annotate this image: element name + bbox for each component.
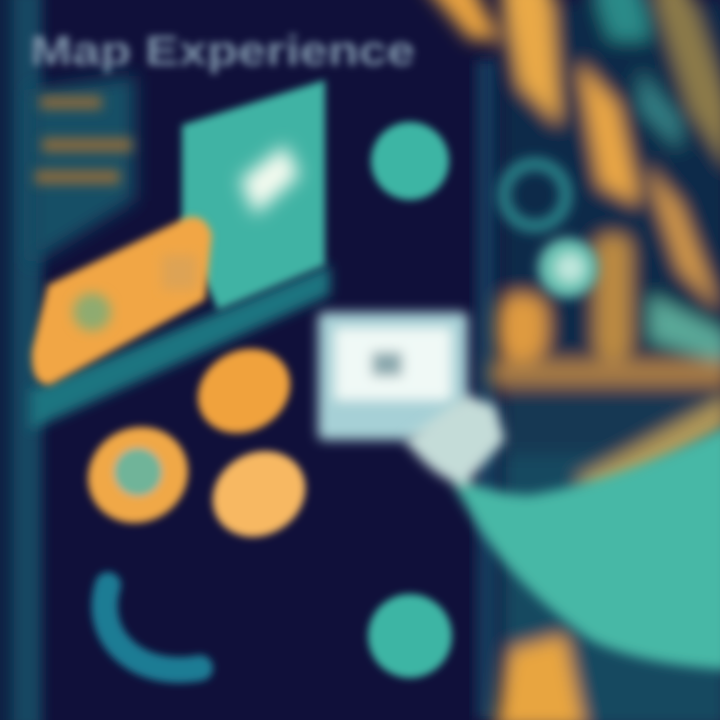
text block: orange lines — [35, 96, 132, 184]
right phone edge — [476, 60, 498, 720]
icon: teal circle top — [371, 122, 449, 200]
icon: light orange ellipse — [197, 434, 321, 554]
panel: dark teal background card — [30, 75, 135, 265]
panel: long teal shelf — [30, 265, 330, 430]
right background scene — [420, 0, 720, 720]
panel: teal card — [182, 80, 325, 310]
icon: orange ellipse — [182, 332, 306, 450]
title: Map Experience — [30, 27, 415, 74]
arm and hand — [405, 395, 720, 670]
icon: circle on orange card — [73, 293, 111, 331]
icon: small mark on orange card — [162, 255, 197, 290]
left phone edge — [0, 0, 42, 720]
icon: teal circle bottom — [368, 594, 452, 678]
icon: white diamond on teal card — [240, 145, 300, 215]
icon: orange ring with teal center — [70, 409, 206, 541]
panel: orange card — [32, 217, 212, 385]
icon: phone handset — [105, 585, 200, 670]
card in hand — [318, 312, 468, 440]
teal rings and dot on right — [504, 164, 598, 298]
